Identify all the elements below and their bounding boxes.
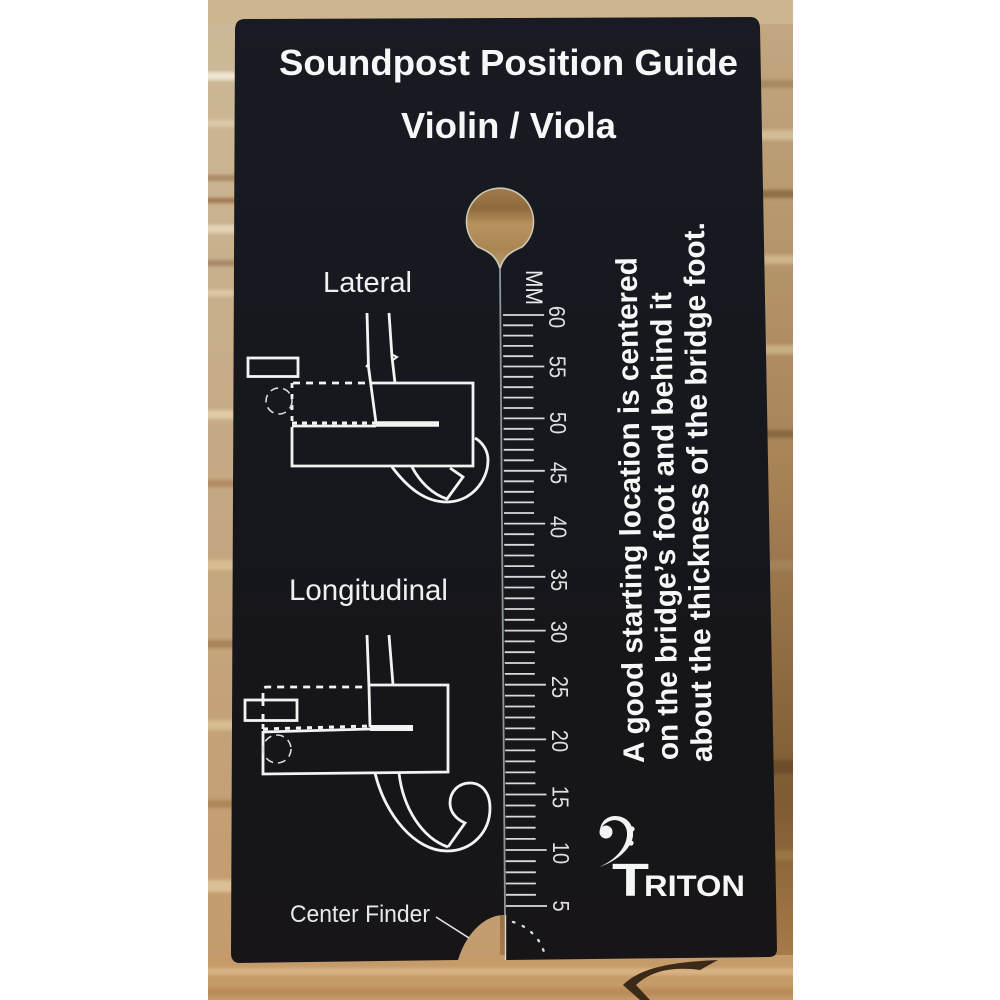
instructions text: A good starting location is centered: [610, 257, 651, 763]
instructions text: on the bridge’s foot and behind it: [645, 292, 685, 760]
ruler numbers: 45: [545, 462, 572, 484]
heading: longitudinal: Longitudinal: [289, 574, 448, 607]
ruler unit: MM: [521, 270, 547, 305]
label: center finder: Center Finder: [290, 901, 430, 928]
ruler numbers: 10: [548, 842, 574, 864]
ruler ticks: [503, 315, 547, 906]
ruler numbers: 25: [547, 676, 573, 698]
hanging hole: [466, 188, 533, 269]
dotted center arc: [513, 922, 545, 958]
ruler numbers: 60: [544, 306, 570, 328]
ruler numbers: 50: [545, 412, 571, 434]
title: Soundpost Position Guide: [279, 42, 738, 83]
slit lower edge: [504, 915, 506, 960]
ruler numbers: [544, 306, 574, 912]
ruler numbers: 30: [546, 621, 572, 643]
ruler numbers: 15: [547, 786, 574, 808]
ruler numbers: 35: [546, 569, 572, 591]
logo: Triton: RITON: [644, 870, 745, 903]
icon: bass clef: [599, 816, 635, 867]
logo: Triton: [612, 854, 745, 906]
ruler numbers: 5: [548, 900, 574, 912]
wood background: [200, 0, 800, 1000]
ruler numbers: 55: [544, 356, 571, 378]
diagram: longitudinal: [245, 635, 490, 851]
instructions text: [610, 222, 719, 763]
diagram: lateral: [248, 313, 488, 502]
center slit: [500, 268, 505, 915]
ruler numbers: 40: [545, 516, 572, 538]
instructions text: about the thickness of the bridge foot.: [678, 222, 719, 762]
logo: Triton: T: [612, 854, 649, 906]
ruler numbers: 20: [547, 730, 573, 752]
pointer: center finder: [436, 917, 469, 938]
subtitle: Violin / Viola: [401, 105, 617, 146]
heading: lateral: Lateral: [323, 267, 412, 299]
card panel: [231, 17, 777, 963]
